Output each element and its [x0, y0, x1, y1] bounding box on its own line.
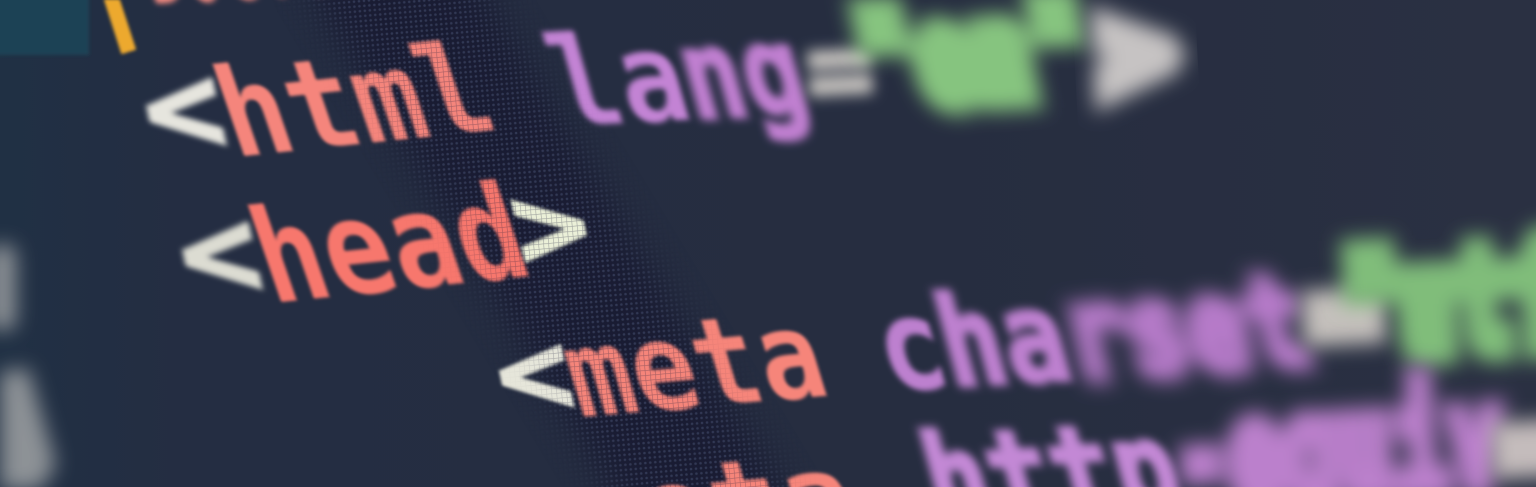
- code line: head: [163, 156, 604, 334]
- teal gutter block: [0, 0, 89, 55]
- attribute lang, start: la: [531, 4, 704, 155]
- code line: html lang: [127, 0, 1173, 186]
- screen pixel grid in the focal band: [319, 0, 784, 487]
- opening bracket: <: [481, 305, 586, 444]
- attribute lang, end: ng: [661, 0, 822, 148]
- equals sign: =: [1300, 239, 1387, 388]
- opening bracket: <: [163, 179, 274, 327]
- attribute charset, end: rset: [1048, 249, 1323, 407]
- code line: meta charset: [481, 215, 1536, 446]
- tag name html: html: [196, 16, 511, 186]
- subtle pixel lines over in-focus letters: [352, 38, 802, 487]
- attribute charset, ha: ha: [920, 264, 1084, 415]
- left margin blurred gutter marks: [0, 245, 56, 487]
- attribute charset, c: c: [858, 272, 962, 419]
- code line: meta http-equiv: [620, 357, 1536, 487]
- orange cursor bar: [105, 0, 135, 53]
- closing bracket: >: [497, 157, 604, 296]
- tag name meta: meta: [546, 285, 842, 446]
- tag name head: head: [231, 156, 547, 334]
- opening bracket: <: [127, 35, 238, 183]
- equals sign: =: [802, 0, 877, 139]
